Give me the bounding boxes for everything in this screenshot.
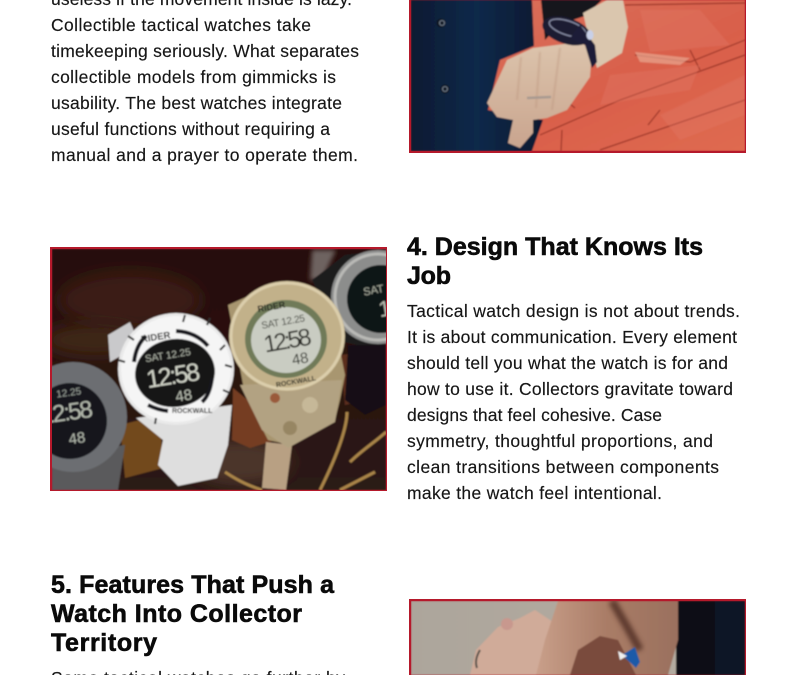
dried grass [225, 412, 386, 490]
text block: section 4 body: should tell you what the watch is for and [407, 353, 728, 373]
text block: section 4 body: It is about communication. Every element [407, 327, 737, 347]
heading: 5. Features That Push a Watch Into Collector Territory: 5. Features That Push a [51, 571, 335, 599]
text block: section 4 body: Tactical watch design is not about trends. [407, 301, 740, 321]
heading: 4. Design That Knows Its Job: 4. Design That Knows Its [407, 233, 703, 261]
text block: section 3 body: manual and a prayer to operate them. [51, 145, 358, 165]
heading: 5. Features That Push a Watch Into Collector Territory [51, 571, 335, 657]
photo: wrist with watch against red brick wall [409, 0, 746, 153]
text block: section 3 body: usability. The best watches integrate [51, 93, 342, 113]
heading: 5. Features That Push a Watch Into Collector Territory: Territory [51, 629, 157, 657]
text block: section 4 body: how to use it. Collectors gravitate toward [407, 379, 733, 399]
heading: 4. Design That Knows Its Job [407, 233, 703, 290]
text block: section 3 body [51, 0, 359, 165]
photo: row of camouflage digital watches: 48 [174, 386, 193, 406]
log [121, 420, 162, 479]
white watch case [118, 313, 234, 425]
photo: row of camouflage digital watches: 12:58 [39, 396, 95, 430]
text block: section 4 body: designs that feel cohesive. Case [407, 405, 662, 425]
white watch strap [136, 405, 232, 486]
photo: row of camouflage digital watches: 12:58 [144, 358, 202, 394]
left grey watch [52, 445, 125, 490]
photo: row of camouflage digital watches: ROCKWALL [172, 408, 213, 415]
text block: section 4 body: symmetry, thoughtful proportions, and [407, 431, 713, 451]
photo: row of camouflage digital watches: ROCKWALL [276, 375, 317, 389]
photo: row of camouflage digital watches: RIDER [257, 299, 287, 314]
right dark watch [312, 252, 385, 346]
photo: clasped hands with blue watch detail [409, 599, 746, 675]
text block: section 3 body: useful functions without requiring a [51, 119, 330, 139]
photo: row of camouflage digital watches: SAT 12.25 [261, 313, 306, 332]
heading: 5. Features That Push a Watch Into Collector Territory: Watch Into Collector [51, 600, 302, 628]
heading: 4. Design That Knows Its Job: Job [407, 262, 451, 290]
text block: section 4 body: clean transitions between components [407, 457, 719, 477]
beige watch case [229, 281, 345, 391]
photo: row of camouflage digital watches [50, 247, 387, 491]
text block: section 3 body: timekeeping seriously. What separates [51, 41, 359, 61]
text block: section 4 body [407, 301, 740, 503]
photo: row of camouflage digital watches: 48 [68, 429, 86, 448]
photo: row of camouflage digital watches: SAT [362, 283, 385, 299]
text block: section 4 body: make the watch feel intentional. [407, 483, 662, 503]
beige watch strap [228, 290, 345, 445]
photo: row of camouflage digital watches: 48 [291, 349, 310, 369]
photo: row of camouflage digital watches: 12:58 [262, 324, 314, 359]
photo: row of camouflage digital watches: SAT 12.25 [144, 347, 192, 365]
photo: row of camouflage digital watches: RIDER [140, 330, 171, 345]
photo: row of camouflage digital watches: 1 [376, 295, 393, 322]
text block: section 3 body: Collectible tactical watches take [51, 15, 311, 35]
text block: section 3 body: collectible models from gimmicks is [51, 67, 336, 87]
photo: row of camouflage digital watches: 12.25 [56, 386, 82, 401]
